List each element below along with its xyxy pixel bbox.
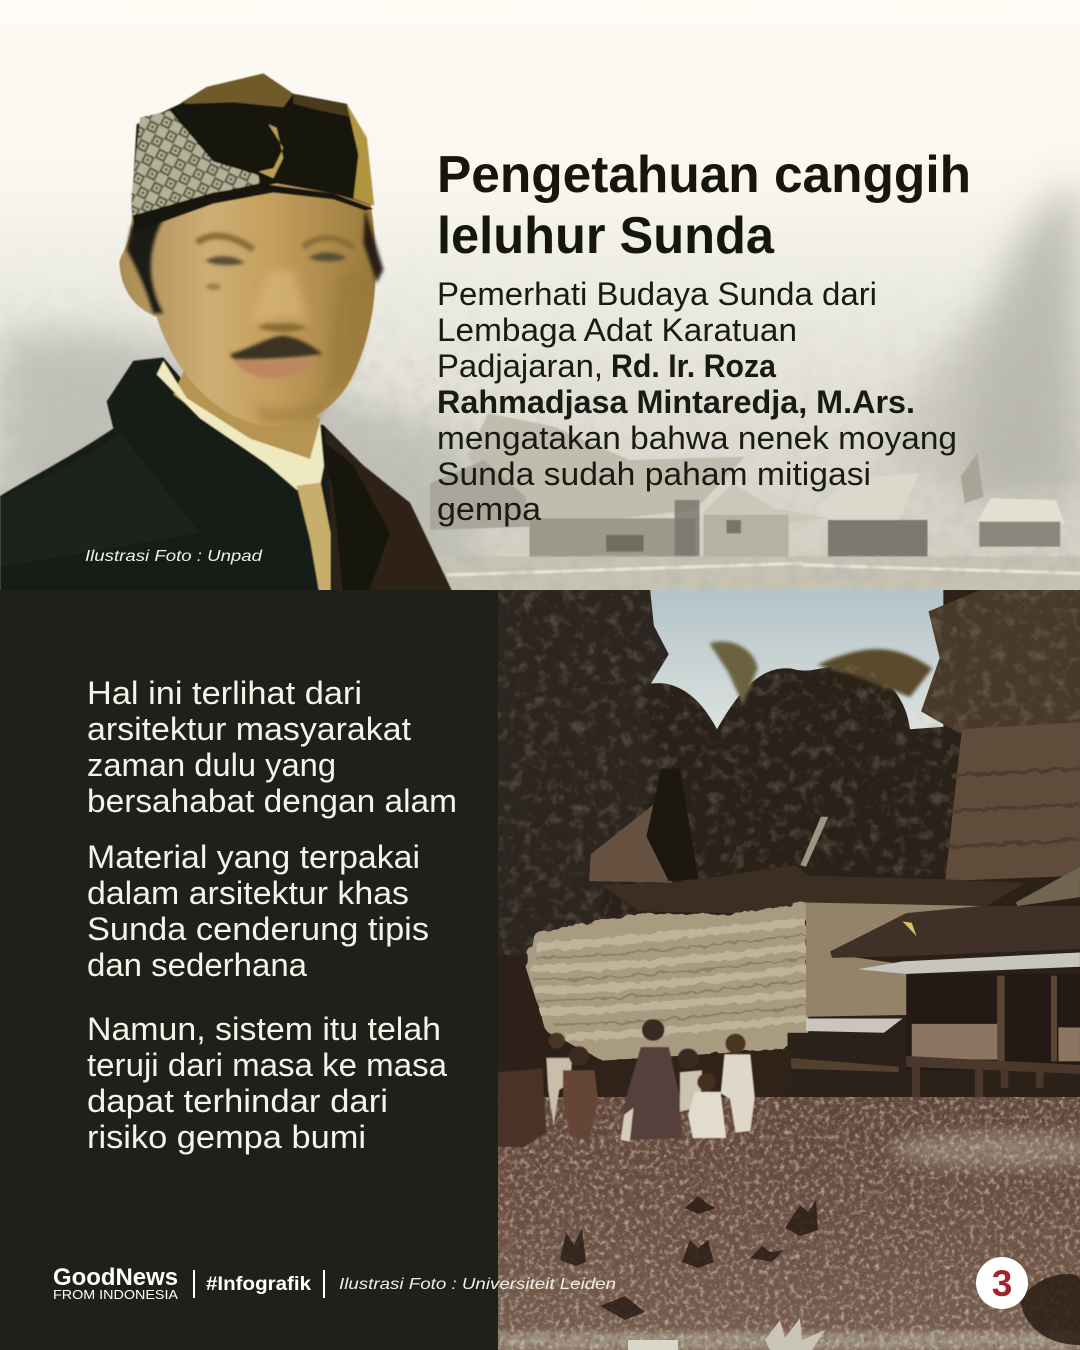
photo credit: Universiteit Leiden: Ilustrasi Foto : Universiteit Leiden <box>339 1276 616 1293</box>
small awning and shed <box>787 1033 906 1094</box>
villager boy in white at back left <box>546 1058 572 1126</box>
hat gold top <box>182 74 293 107</box>
title: leluhur Sunda <box>437 207 775 265</box>
mouth <box>233 357 317 378</box>
intro text block: gempa <box>437 491 541 527</box>
jacket brown right side <box>325 428 455 597</box>
photo: portrait of Rd. Ir. Roza Rahmadjasa Mintaredja <box>0 74 455 597</box>
intro text block: Rd. Ir. Roza <box>611 348 776 384</box>
text block: paragraph 2: dan sederhana <box>87 947 307 983</box>
chin shadow <box>253 391 330 423</box>
mustache <box>230 335 323 360</box>
page number badge <box>976 1257 1028 1309</box>
yellow marker <box>903 921 917 936</box>
text block: paragraph 2: Material yang terpakai <box>87 839 420 875</box>
photo credit: Unpad: Ilustrasi Foto : Unpad <box>85 548 263 565</box>
neck <box>173 364 320 482</box>
text block: paragraph 1: Hal ini terlihat dari <box>87 675 362 711</box>
children at left <box>498 1069 546 1147</box>
text block: paragraph 3 <box>87 1011 447 1155</box>
ground plants <box>560 1196 1080 1345</box>
metal awning <box>858 952 1080 974</box>
text block: paragraph 2: dalam arsitektur khas <box>87 875 409 911</box>
eyes <box>205 256 245 265</box>
footer divider <box>193 1270 195 1298</box>
text block: paragraph 3: dapat terhindar dari <box>87 1083 388 1119</box>
left tree <box>498 590 669 958</box>
floor and stilts <box>906 1056 1080 1074</box>
centre trees <box>620 664 958 883</box>
hut: right <box>816 473 919 522</box>
shirtless boy <box>563 1070 598 1140</box>
seated boy in white <box>688 1092 726 1138</box>
page number badge: 3 <box>992 1263 1012 1304</box>
field <box>430 557 1080 590</box>
nose shadow <box>257 324 307 332</box>
intro text block: Rahmadjasa Mintaredja, M.Ars. <box>437 384 915 420</box>
under-roof shadow <box>591 1049 791 1119</box>
jacket <box>0 357 455 597</box>
ground texture dark <box>498 1097 1080 1350</box>
panel: top background with misty village <box>0 0 1080 590</box>
photo: village ground <box>498 1097 1080 1350</box>
standing man in dark coat <box>622 1047 682 1140</box>
text block: paragraph 2 <box>87 839 429 983</box>
title: Pengetahuan canggih <box>437 146 971 204</box>
hashtag: #Infografik <box>206 1274 311 1295</box>
facial details <box>127 209 383 378</box>
intro text block: Lembaga Adat Karatuan <box>437 312 797 348</box>
hat batik pattern <box>132 111 260 215</box>
pale band at bottom <box>498 1332 1080 1350</box>
hut: large left roof <box>467 413 745 523</box>
hat brim <box>133 184 373 232</box>
jacket shoulder sheen <box>0 432 200 567</box>
text block: paragraph 3: Namun, sistem itu telah <box>87 1011 441 1047</box>
footer divider <box>323 1270 325 1298</box>
intro text block: mengatakan bahwa nenek moyang <box>437 420 957 456</box>
left doorway <box>498 958 546 1069</box>
leaning pole <box>800 817 828 867</box>
hat <box>132 74 374 232</box>
dark upper roof band <box>602 865 1025 913</box>
boy behind <box>680 1070 702 1111</box>
group of villagers <box>498 1019 755 1147</box>
pale patch upper right <box>890 1132 1080 1168</box>
field texture <box>440 555 1080 590</box>
text block: paragraph 3: teruji dari masa ke masa <box>87 1047 447 1083</box>
village huts <box>430 413 1080 590</box>
misty trees right <box>960 180 1080 500</box>
title <box>437 146 971 265</box>
hut: centre <box>704 483 828 523</box>
shirt collar <box>157 361 324 490</box>
small gable roof <box>589 804 672 883</box>
ground texture light <box>498 1097 1080 1350</box>
intro text block: Padjajaran, <box>437 348 603 384</box>
intro text block: Pemerhati Budaya Sunda dari <box>437 276 877 312</box>
standing boy in white <box>721 1054 755 1133</box>
dark wooden roof <box>830 906 1080 958</box>
logo: GoodNews from Indonesia: GoodNews <box>53 1264 178 1291</box>
intro text block: Sunda sudah paham mitigasi <box>437 456 871 492</box>
hut: far right <box>977 498 1064 523</box>
misty forest left <box>0 332 470 590</box>
main thatched roof <box>524 902 808 1061</box>
misty forest texture <box>0 363 1041 555</box>
text block: paragraph 1 <box>87 675 457 819</box>
tall thatched wall <box>945 722 1080 881</box>
hat brooch <box>258 124 283 178</box>
soft face shading <box>250 270 370 423</box>
text block: paragraph 1: arsitektur masyarakat <box>87 711 411 747</box>
panel: dark text panel <box>0 590 498 1350</box>
tie <box>297 482 331 597</box>
intro text block <box>437 276 957 527</box>
sky <box>646 590 943 740</box>
right cheek shadow <box>323 270 370 398</box>
mole <box>206 283 221 290</box>
right tree <box>921 590 1080 733</box>
scene base <box>498 590 1080 1150</box>
face <box>119 182 376 426</box>
banana tree <box>961 453 983 503</box>
text block: paragraph 3: risiko gempa bumi <box>87 1119 366 1155</box>
house wall <box>906 974 1080 1070</box>
pale fronds <box>765 1318 825 1350</box>
photo: traditional Sundanese village buildings <box>498 590 1080 1150</box>
text block: paragraph 1: zaman dulu yang <box>87 747 336 783</box>
second thatched roof <box>806 902 980 1017</box>
text block: paragraph 2: Sunda cenderung tipis <box>87 911 429 947</box>
nose light <box>250 270 310 324</box>
hair sideburn <box>127 219 163 314</box>
text block: paragraph 1: bersahabat dengan alam <box>87 783 457 819</box>
light thatch corner <box>1016 867 1080 906</box>
tree foliage texture <box>498 590 1080 961</box>
logo: GoodNews from Indonesia: FROM INDONESIA <box>53 1288 179 1302</box>
